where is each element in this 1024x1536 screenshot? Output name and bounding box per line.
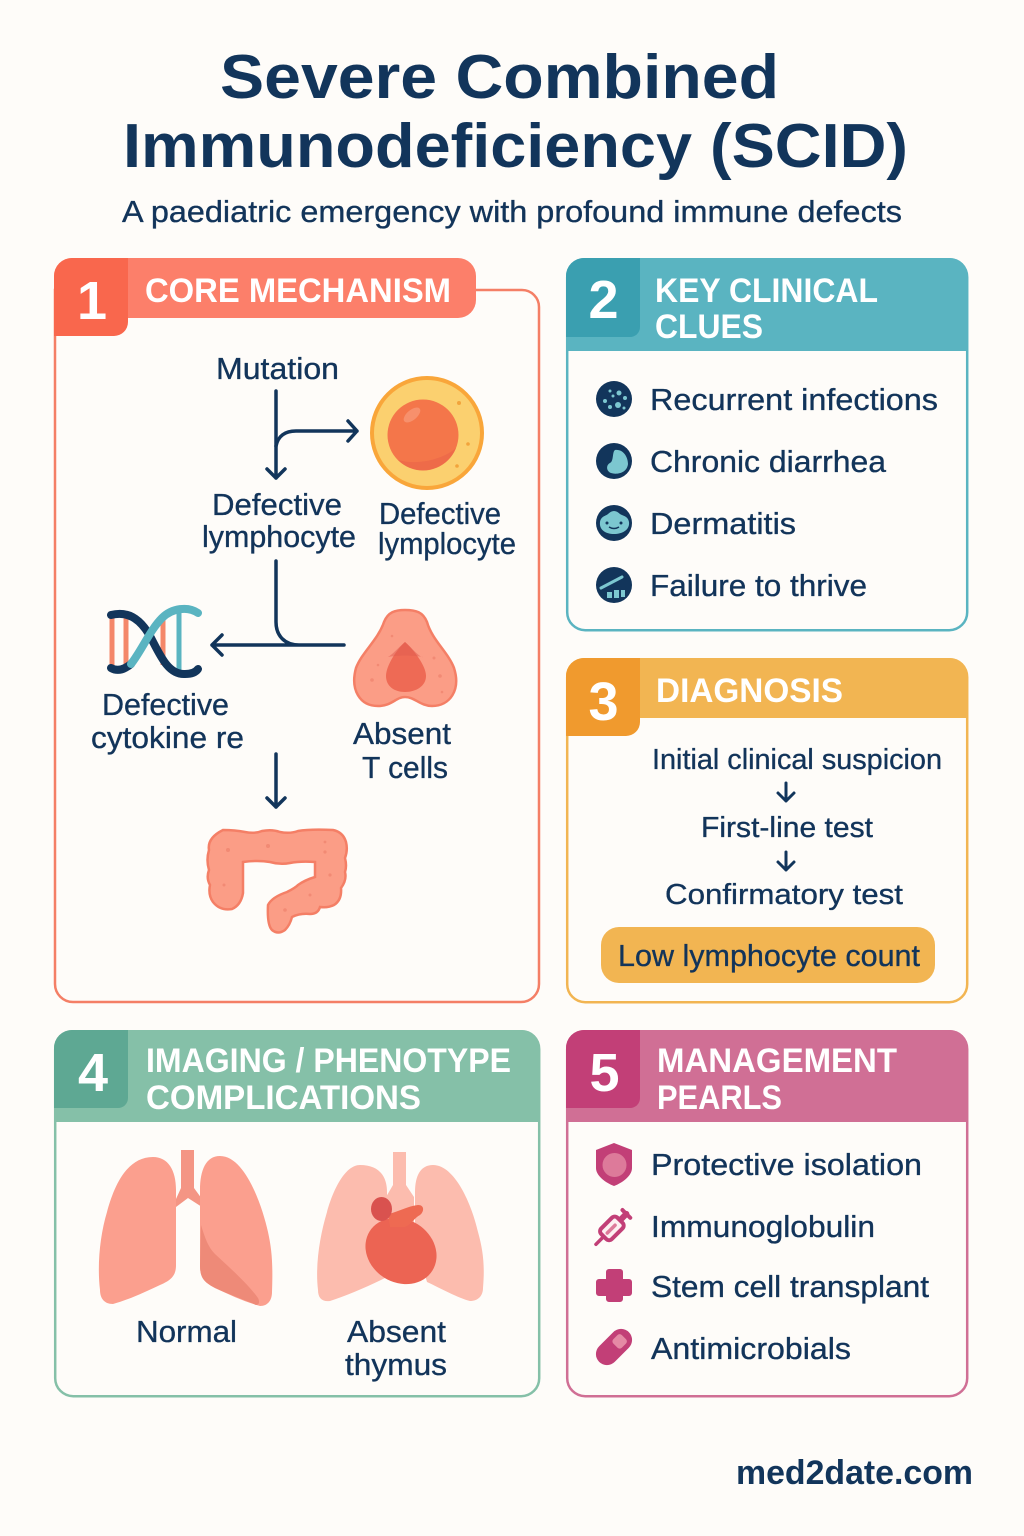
icon: failure to thrive (596, 567, 632, 603)
text: confirmatory test: Confirmatory test (665, 879, 903, 911)
icon: pill (591, 1324, 637, 1370)
header: core mechanism (54, 258, 476, 336)
header: key clinical clues: 2 (588, 270, 619, 330)
text: first-line test: First-line test (701, 812, 873, 844)
icon: syringe (591, 1209, 632, 1250)
panel: core mechanism (54, 258, 539, 1002)
header: management pearls: MANAGEMENT (657, 1042, 897, 1080)
header: key clinical clues: CLUES (655, 308, 763, 346)
arrow: mutation to defective lymphocyte (267, 391, 285, 478)
title: Immunodeficiency (SCID) (123, 112, 908, 181)
icon: shield (596, 1143, 632, 1186)
chart: normal lungs (99, 1150, 272, 1306)
text: absent T cells: Absent (353, 716, 451, 751)
text: mutation: Mutation (216, 351, 339, 386)
arrow: to colon (267, 754, 285, 807)
header: core mechanism: 1 (77, 271, 107, 331)
text: defective cytokine re: cytokine re (91, 720, 244, 755)
text: failure to thrive: Failure to thrive (650, 568, 867, 603)
callout: low lymphocyte count (601, 927, 935, 983)
icon: thymus (354, 610, 456, 706)
text: protective isolation: Protective isolation (651, 1147, 922, 1182)
header: key clinical clues (566, 258, 968, 351)
icon: lymphocyte cell (372, 378, 482, 488)
panel: management pearls (566, 1030, 968, 1396)
header: imaging: IMAGING / PHENOTYPE (146, 1042, 511, 1080)
text: defective lymphocyte: Defective (212, 487, 342, 522)
text: defective cytokine re (91, 687, 244, 755)
icon: cross (596, 1269, 632, 1302)
text: defective lymplocyte: lymplocyte (378, 526, 516, 561)
header: management pearls: 5 (589, 1043, 620, 1103)
header: management pearls (566, 1030, 968, 1122)
header: core mechanism: CORE MECHANISM (145, 272, 451, 310)
header: diagnosis: 3 (588, 672, 619, 732)
text: dermatitis: Dermatitis (650, 506, 796, 541)
title (123, 43, 908, 181)
header: imaging: COMPLICATIONS (146, 1079, 421, 1117)
text: defective cytokine re: Defective (102, 687, 229, 722)
text: stem cell transplant: Stem cell transplant (651, 1269, 929, 1304)
chart: absent thymus lungs (317, 1152, 484, 1301)
text: normal: Normal (136, 1314, 237, 1349)
panel: key clinical clues (566, 258, 968, 630)
arrow: diagnosis step 1 (778, 783, 794, 801)
header: key clinical clues: KEY CLINICAL (655, 272, 878, 310)
text: immunoglobulin: Immunoglobulin (651, 1209, 875, 1244)
icon: recurrent infections (596, 381, 632, 417)
arrow: to cytokine receptor (212, 561, 344, 655)
subtitle: A paediatric emergency with profound immune defects (122, 194, 902, 229)
header: imaging: 4 (78, 1043, 108, 1103)
text: defective lymphocyte (202, 487, 356, 554)
panel: imaging / phenotype complications (54, 1030, 540, 1396)
callout: low lymphocyte count: Low lymphocyte count (618, 938, 920, 973)
text: chronic diarrhea: Chronic diarrhea (650, 444, 887, 479)
icon: colon (208, 830, 347, 932)
icon: DNA (111, 609, 198, 674)
text: recurrent infections: Recurrent infections (650, 382, 938, 417)
header: imaging (54, 1030, 540, 1122)
text: defective lymplocyte: Defective (379, 496, 501, 531)
text: antimicrobials: Antimicrobials (651, 1331, 851, 1366)
arrow: branch to cell (276, 421, 357, 446)
arrow: diagnosis step 2 (778, 852, 794, 870)
header: diagnosis: DIAGNOSIS (656, 672, 843, 710)
header: management pearls: PEARLS (657, 1079, 782, 1117)
text: absent thymus: Absent (347, 1314, 446, 1349)
footer: website: med2date.com (736, 1454, 973, 1492)
title: Severe Combined (220, 43, 779, 112)
text: absent thymus: thymus (345, 1347, 447, 1382)
text: absent thymus (345, 1314, 447, 1382)
header: diagnosis (566, 658, 968, 736)
text: defective lymphocyte: lymphocyte (202, 519, 356, 554)
icon: chronic diarrhea (596, 443, 632, 479)
panel: diagnosis (566, 658, 968, 1002)
text: initial clinical suspicion: Initial clinical suspicion (652, 744, 942, 776)
text: defective lymplocyte (378, 496, 516, 561)
text: absent T cells (353, 716, 451, 785)
icon: dermatitis (596, 505, 632, 541)
text: absent T cells: T cells (362, 750, 448, 785)
